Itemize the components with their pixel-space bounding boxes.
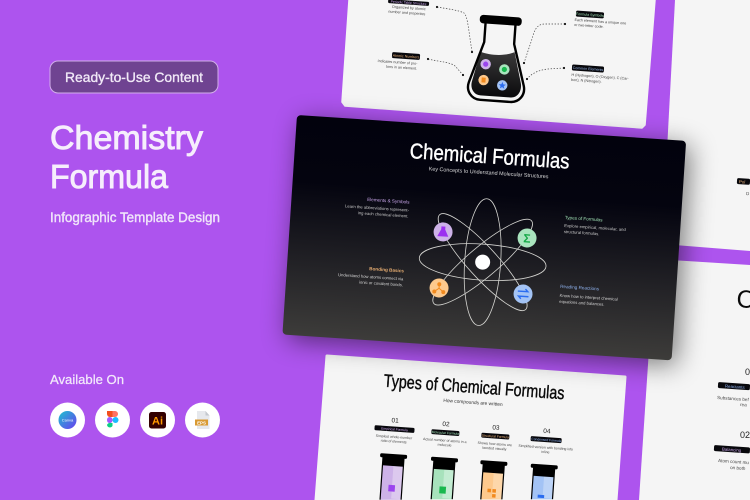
text: elements and symbols (345, 195, 410, 219)
text: reading reactions: Know how to interpret chemical (559, 293, 618, 302)
icon: canva: Canva (62, 418, 74, 422)
label: periodic table (387, 0, 429, 16)
text: reactants description (717, 395, 750, 407)
text: bonding basics: Bonding Basics (369, 266, 405, 273)
panel: right upper slide (662, 0, 750, 251)
column 03: structural: 03 (492, 424, 500, 432)
column 01: empirical: Empirical Formula (381, 427, 408, 432)
tube 01 (377, 453, 407, 500)
heading: available on: Available On (50, 372, 124, 387)
icon: illustrator: Ai (152, 416, 163, 428)
text: reading reactions: equations and balances. (559, 299, 605, 307)
panel: right lower slide (639, 259, 750, 500)
connector dots (427, 6, 566, 80)
flask bubble green (499, 64, 510, 75)
icon: canva (50, 402, 85, 438)
column 01: empirical: Simplest whole-number (376, 434, 413, 440)
orbits (415, 195, 550, 330)
label: common elements: H (Hydrogen), O (Oxygen), C (Car- (571, 73, 630, 81)
text: types of formulas: structural formulas. (564, 229, 600, 236)
tag: balancing (714, 445, 750, 454)
nucleus (475, 254, 491, 270)
title: Chemistry (50, 119, 203, 156)
text: balancing description (718, 458, 750, 471)
panel: top slide with flask (342, 0, 655, 128)
text: types of formulas (564, 215, 627, 238)
tube 03 (478, 460, 507, 500)
column 04: condensed: Simplified version with bonding info (518, 444, 573, 452)
text: reading reactions (559, 284, 619, 308)
icon: eps file (185, 402, 220, 438)
subheading: Key Concepts to Understand Molecular Structures (428, 166, 549, 180)
icon: flask (467, 14, 529, 103)
column 02: molecular: 02 (442, 421, 450, 428)
icon: flask (433, 222, 453, 242)
column 01: empirical: 01 (391, 417, 399, 425)
label: formula symbols (574, 10, 627, 31)
label: atomic numbers: Atomic Numbers (393, 54, 420, 59)
icon: illustrator (140, 402, 175, 438)
text: bonding basics (338, 264, 405, 287)
flask outline (467, 22, 529, 103)
title: Formula (50, 158, 169, 195)
label: common elements (571, 64, 630, 86)
badge: ready-to-use content: Ready-to-Use Content (65, 69, 203, 85)
label: formula symbols: Each element has a unique one (574, 18, 626, 26)
label: formula symbols: or two-letter code. (574, 23, 604, 29)
column 03: structural (474, 423, 513, 500)
label: formula symbols: Formula Symbols (576, 12, 604, 18)
text: types of formulas: Types of Formulas (565, 215, 603, 223)
column 04: condensed: inline (541, 450, 550, 454)
label: atomic numbers: tons in an element. (386, 65, 417, 71)
icon: sigma: Σ (523, 231, 531, 246)
label: atomic numbers (377, 51, 420, 71)
atom diagram (415, 195, 550, 330)
column 02: molecular (419, 420, 468, 500)
subheading: How compounds are written (443, 398, 503, 408)
flask bubble orange (478, 74, 489, 86)
text: reactants description: rea (740, 402, 747, 407)
subtitle: Infographic Template Design (50, 209, 220, 225)
text: types of formulas: Explore empirical, molecular, and (564, 223, 627, 232)
text: elements and symbols: Elements & Symbols (367, 197, 410, 205)
column 04: condensed: Condensed Formula (531, 437, 562, 443)
label: periodic table: Organized by atomic (392, 5, 426, 11)
tag: polarity: Pol (739, 179, 745, 185)
icon: eps file: EPS (197, 420, 206, 425)
label: atomic numbers: Indicates number of pro- (377, 59, 418, 66)
column 04: condensed (515, 426, 574, 500)
column 02: molecular: Actual number of atoms in a (423, 437, 467, 444)
tag: reactants (718, 382, 750, 390)
shadow of dark slide (287, 120, 691, 366)
icon: molecule (429, 278, 449, 298)
tag: reactants: Reactants (725, 383, 746, 390)
column 01: empirical: ratio of elements (381, 439, 407, 444)
heading: chemical formulas: Chemical Formulas (409, 139, 570, 174)
panel: dark slide with atom (282, 115, 686, 360)
label: common elements: bon), N (Nitrogen). (571, 78, 602, 84)
tag: polarity (737, 178, 750, 185)
icon: figma (95, 402, 130, 438)
column 01: empirical (370, 416, 415, 500)
number: 01: 0 (745, 367, 750, 377)
text: bonding basics: Understand how atoms connect via (338, 272, 404, 281)
column 02: molecular: Molecular Formula (432, 430, 459, 436)
column 03: structural: bonded visually (482, 446, 507, 451)
column 02: molecular: molecule (437, 443, 452, 448)
label: periodic table: number and properties (388, 10, 426, 16)
text: bonding basics: ionic or covalent bonds. (359, 279, 403, 287)
text: balancing description: Atom count mu (718, 458, 750, 465)
label: common elements: Common Elements (573, 66, 604, 72)
text: balancing description: on both (730, 465, 746, 471)
flask bubble purple (480, 59, 491, 70)
flask cap (480, 15, 522, 26)
column 03: structural: Structural Formula (482, 434, 509, 439)
column 03: structural: Shows how atoms are (477, 441, 512, 447)
title (50, 119, 203, 195)
tag: balancing: Balancing (722, 447, 742, 453)
panel: bottom slide with test tubes (316, 356, 625, 500)
text: elements and symbols: ing each chemical element. (358, 210, 409, 219)
flask bubble blue (497, 80, 508, 91)
text: reactants description: Substances bef (717, 395, 750, 402)
text: reading reactions: Reading Reactions (560, 284, 600, 291)
text: partial description: D (746, 191, 749, 196)
icon: exchange arrows (513, 284, 533, 304)
column 04: condensed: 04 (543, 428, 551, 435)
flask liquid (471, 49, 523, 98)
dotted connectors (428, 7, 565, 79)
badge: ready-to-use content (50, 61, 218, 93)
tube 04 (528, 464, 558, 500)
number: 02: 02 (740, 430, 750, 440)
text: elements and symbols: Learn the abbreviations represent- (345, 203, 410, 213)
heading: types of chemical formulas: Types of Chemical Formulas (383, 371, 565, 403)
tube 02 (428, 457, 458, 500)
